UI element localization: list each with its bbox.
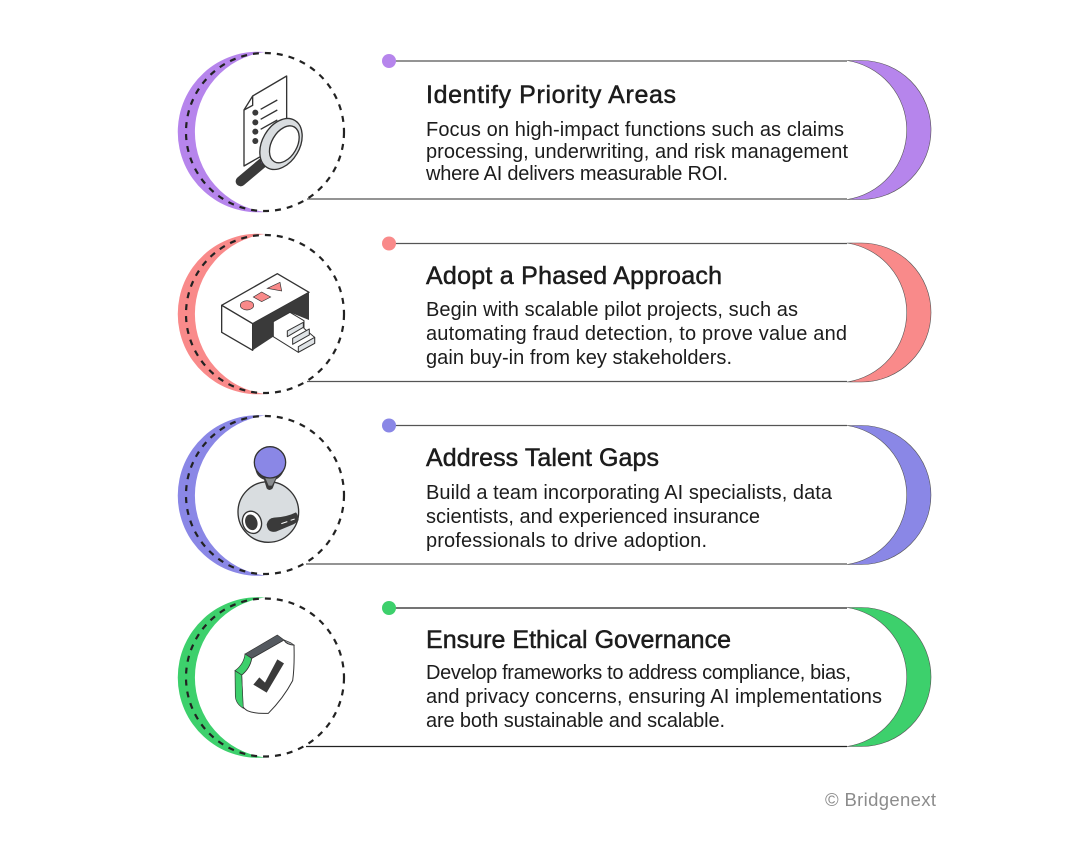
description <box>426 482 833 552</box>
description: are both sustainable and scalable. <box>426 710 725 732</box>
card outline <box>306 426 847 564</box>
marker dot <box>382 601 396 615</box>
panel: Identify Priority Areas <box>178 52 931 212</box>
dashed circle <box>186 235 344 393</box>
panel: Address Talent Gaps <box>178 415 931 576</box>
description: gain buy-in from key stakeholders. <box>426 347 732 369</box>
description: scientists, and experienced insurance <box>426 506 760 528</box>
right crescent <box>847 243 931 382</box>
heading: Identify Priority Areas <box>426 81 676 109</box>
card outline <box>307 61 847 199</box>
heading: Adopt a Phased Approach <box>426 262 722 290</box>
footer credit: © Bridgenext <box>825 789 936 810</box>
dashed circle <box>186 598 344 756</box>
icon: shield with check <box>235 635 294 713</box>
heading: Address Talent Gaps <box>426 444 659 472</box>
description: where AI delivers measurable ROI. <box>425 163 728 185</box>
description: and privacy concerns, ensuring AI implementations <box>426 686 882 708</box>
marker dot <box>382 54 396 68</box>
description: professionals to drive adoption. <box>426 530 707 552</box>
description <box>425 119 848 185</box>
left crescent <box>178 415 265 576</box>
icon: joystick <box>238 447 299 542</box>
right crescent <box>847 608 931 746</box>
description: Focus on high-impact functions such as claims <box>426 119 844 141</box>
description <box>426 299 847 369</box>
description: Develop frameworks to address compliance, bias, <box>426 662 851 684</box>
heading: Ensure Ethical Governance <box>426 626 731 654</box>
left crescent <box>178 52 265 212</box>
right crescent <box>847 426 931 564</box>
right crescent <box>847 60 931 200</box>
panel: Ensure Ethical Governance <box>178 597 931 758</box>
marker dot <box>382 418 396 432</box>
description: automating fraud detection, to prove value and <box>426 323 847 345</box>
icon: building with stairs <box>222 274 315 352</box>
dashed circle <box>186 416 344 574</box>
icon: document with magnifier <box>241 76 311 181</box>
panel: Adopt a Phased Approach <box>178 234 931 394</box>
description: processing, underwriting, and risk management <box>426 141 848 163</box>
marker dot <box>382 236 396 250</box>
description <box>426 662 882 732</box>
card outline <box>306 608 847 746</box>
description: Begin with scalable pilot projects, such as <box>426 299 798 321</box>
left crescent <box>178 234 265 394</box>
dashed circle <box>186 53 344 211</box>
card outline <box>307 244 847 382</box>
left crescent <box>178 597 265 758</box>
description: Build a team incorporating AI specialists, data <box>426 482 833 504</box>
